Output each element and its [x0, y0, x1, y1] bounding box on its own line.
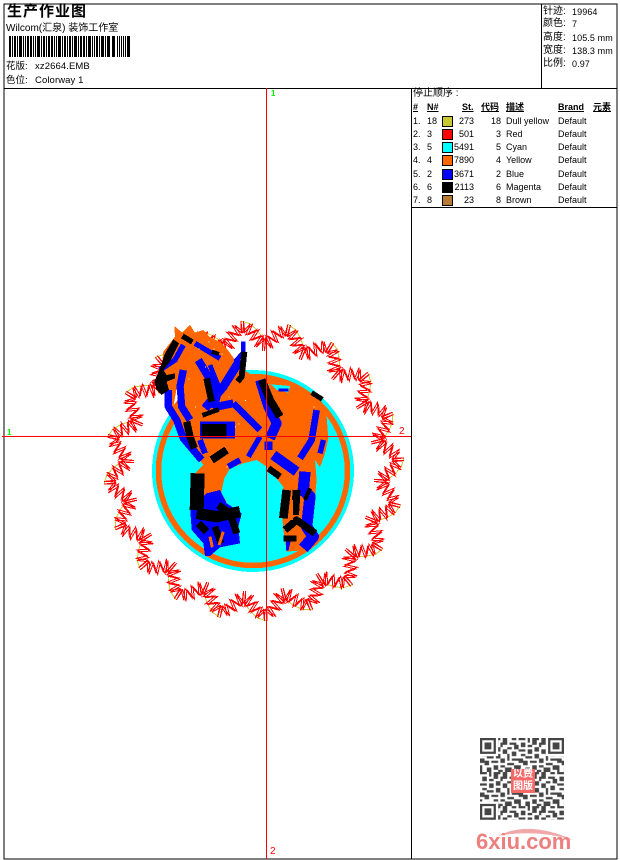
row 5	[413, 169, 587, 180]
scalloped zigzag ring	[102, 319, 406, 623]
row 7: Default	[558, 195, 587, 205]
stats panel	[543, 5, 613, 69]
row 1: Dull yellow	[506, 116, 549, 126]
row 1: 18	[427, 116, 437, 126]
table title: 停止顺序 :	[413, 88, 459, 99]
crosshair label: right 2: 2	[399, 426, 405, 437]
crosshair label: top 1: 1	[271, 89, 275, 98]
table header: N#	[427, 102, 439, 112]
colour count	[543, 17, 577, 29]
text: Colorway 1	[35, 75, 84, 86]
row 3: Cyan	[506, 142, 527, 152]
row 6: Magenta	[506, 182, 541, 192]
row 7: 7.	[413, 195, 421, 205]
table header: 描述	[506, 102, 524, 112]
row 3: 5	[427, 142, 432, 152]
table header: Brand	[558, 102, 584, 112]
table header: 代码	[481, 102, 499, 112]
row 3: Default	[558, 142, 587, 152]
colorway	[6, 74, 84, 86]
row 5: Blue	[506, 169, 524, 179]
scale: 比例:	[543, 58, 566, 69]
row 6: 6.	[413, 182, 421, 192]
row 3	[413, 142, 587, 153]
colour count: 颜色:	[543, 18, 566, 29]
row 5: 3671	[454, 169, 474, 179]
horse leg orange accents	[210, 500, 292, 551]
studio name: Wilcom(汇泉) 装饰工作室	[6, 23, 118, 34]
QR seal stamp: 以费	[513, 769, 533, 780]
row 2: Default	[558, 129, 587, 139]
text: xz2664.EMB	[35, 61, 90, 72]
horse black stitches	[154, 336, 322, 543]
colorway: 色位:	[6, 75, 28, 86]
row 2: 3	[496, 129, 501, 139]
row 6: 2113	[455, 182, 474, 192]
width	[543, 44, 613, 56]
row 2: 2.	[413, 129, 421, 139]
row 7: Brown	[506, 195, 532, 205]
cyan disc with orange ring	[152, 370, 354, 572]
QR seal stamp	[511, 769, 535, 793]
table header: St.	[462, 102, 474, 112]
row 2	[413, 129, 587, 140]
title: 生产作业图	[7, 3, 87, 20]
table header	[413, 102, 611, 112]
row 2: 501	[459, 129, 474, 139]
row 1: 273	[459, 116, 474, 126]
row 4: 4	[427, 155, 432, 165]
row 4: 4	[496, 155, 501, 165]
row 6: Default	[558, 182, 587, 192]
row 7: 23	[464, 195, 474, 205]
row 5: 2	[427, 169, 432, 179]
stop sequence table	[413, 87, 611, 206]
stats panel: 19964	[572, 7, 598, 17]
barcode	[9, 36, 130, 57]
stats panel: 105.5 mm	[572, 33, 613, 43]
QR code	[480, 738, 564, 820]
table header: #	[413, 102, 418, 112]
6xiu.com logo text: 6xiu.com	[476, 829, 571, 854]
row 2: Red	[506, 129, 523, 139]
row 3: 3.	[413, 142, 421, 152]
row 7	[413, 195, 587, 206]
stats panel: 138.3 mm	[572, 46, 613, 56]
stitch count: 针迹:	[543, 6, 566, 17]
stats panel: 7	[572, 19, 577, 29]
row 4: Yellow	[506, 155, 532, 165]
design filename	[6, 60, 90, 72]
stitch count	[543, 5, 598, 17]
6xiu logo swoosh	[497, 829, 573, 840]
row 6: 6	[427, 182, 432, 192]
row 2: 3	[427, 129, 432, 139]
cyan gap under the back	[267, 384, 290, 393]
height: 高度:	[543, 32, 566, 43]
crosshair lines	[2, 88, 411, 859]
row 1: 1.	[413, 116, 421, 126]
height	[543, 31, 613, 43]
row 5: 2	[496, 169, 501, 179]
stats panel: 0.97	[572, 59, 590, 69]
row 6	[413, 182, 587, 193]
row 6: 6	[496, 182, 501, 192]
horse white highlights	[174, 342, 314, 518]
row 7: 8	[427, 195, 432, 205]
row 4: 7890	[454, 155, 474, 165]
row 3: 5491	[454, 142, 474, 152]
row 5: Default	[558, 169, 587, 179]
row 1: 18	[491, 116, 501, 126]
crosshair label: left 1: 1	[7, 428, 11, 437]
row 4	[413, 155, 587, 166]
crosshair label: bottom 2: 2	[270, 846, 276, 857]
horse embroidery	[154, 325, 328, 556]
row 4: Default	[558, 155, 587, 165]
row 1	[413, 116, 587, 127]
row 4: 4.	[413, 155, 421, 165]
design filename: 花版:	[6, 61, 28, 72]
QR seal stamp: 图版	[513, 781, 533, 792]
row 3: 5	[496, 142, 501, 152]
row 1: Default	[558, 116, 587, 126]
horse body	[155, 325, 328, 552]
row 5: 5.	[413, 169, 421, 179]
horse blue stitches	[160, 342, 323, 556]
row 7: 8	[496, 195, 501, 205]
scale	[543, 57, 590, 69]
table header: 元素	[593, 102, 611, 112]
width: 宽度:	[543, 45, 566, 56]
